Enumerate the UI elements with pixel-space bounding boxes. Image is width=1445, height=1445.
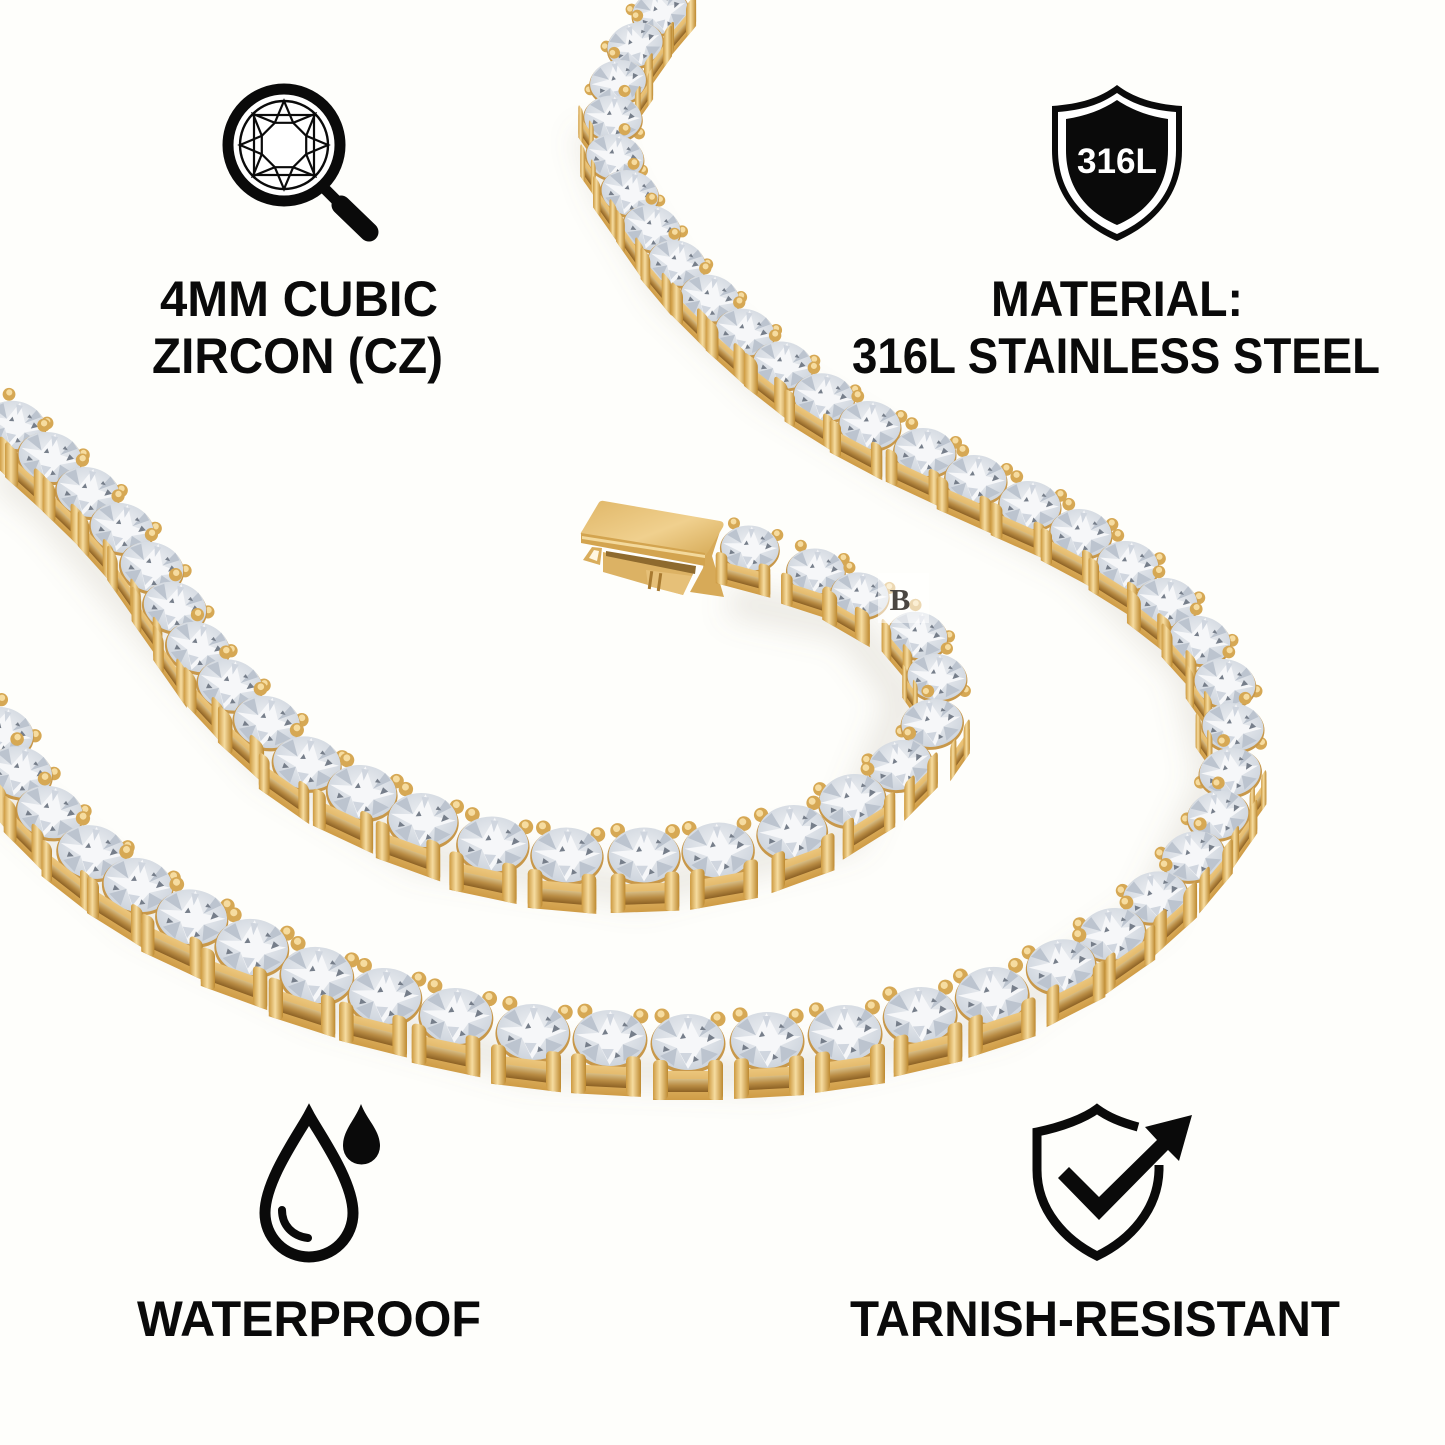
icon: 316L shield (1052, 85, 1182, 241)
necklace: top, right and bottom strand (578, 0, 1271, 1100)
bracelet strand: left side (0, 385, 606, 914)
heading: 4mm cubic zircon: 4MM CUBIC (160, 271, 438, 327)
icon: water drops (265, 1104, 380, 1257)
icon: 316L shield: 316L (1077, 142, 1157, 181)
heading: material: 316L STAINLESS STEEL (852, 328, 1380, 384)
watermark: B (890, 582, 910, 617)
heading: tarnish-resistant: TARNISH-RESISTANT (850, 1291, 1340, 1347)
heading: waterproof: WATERPROOF (137, 1291, 481, 1347)
necklace: left lower strand (0, 690, 649, 1097)
watermark (878, 573, 929, 623)
heading: 4mm cubic zircon: ZIRCON (CZ) (152, 328, 443, 384)
heading: 4mm cubic zircon (152, 271, 443, 384)
clasp (581, 501, 724, 597)
icon: magnifier with diamond (228, 89, 369, 232)
icon: shield with check arrow (1037, 1109, 1192, 1256)
bracelet strand: clasp side and curl (607, 516, 975, 913)
chain shadows (0, 130, 1215, 1075)
heading: material (852, 271, 1380, 384)
heading: material: MATERIAL: (991, 271, 1243, 327)
